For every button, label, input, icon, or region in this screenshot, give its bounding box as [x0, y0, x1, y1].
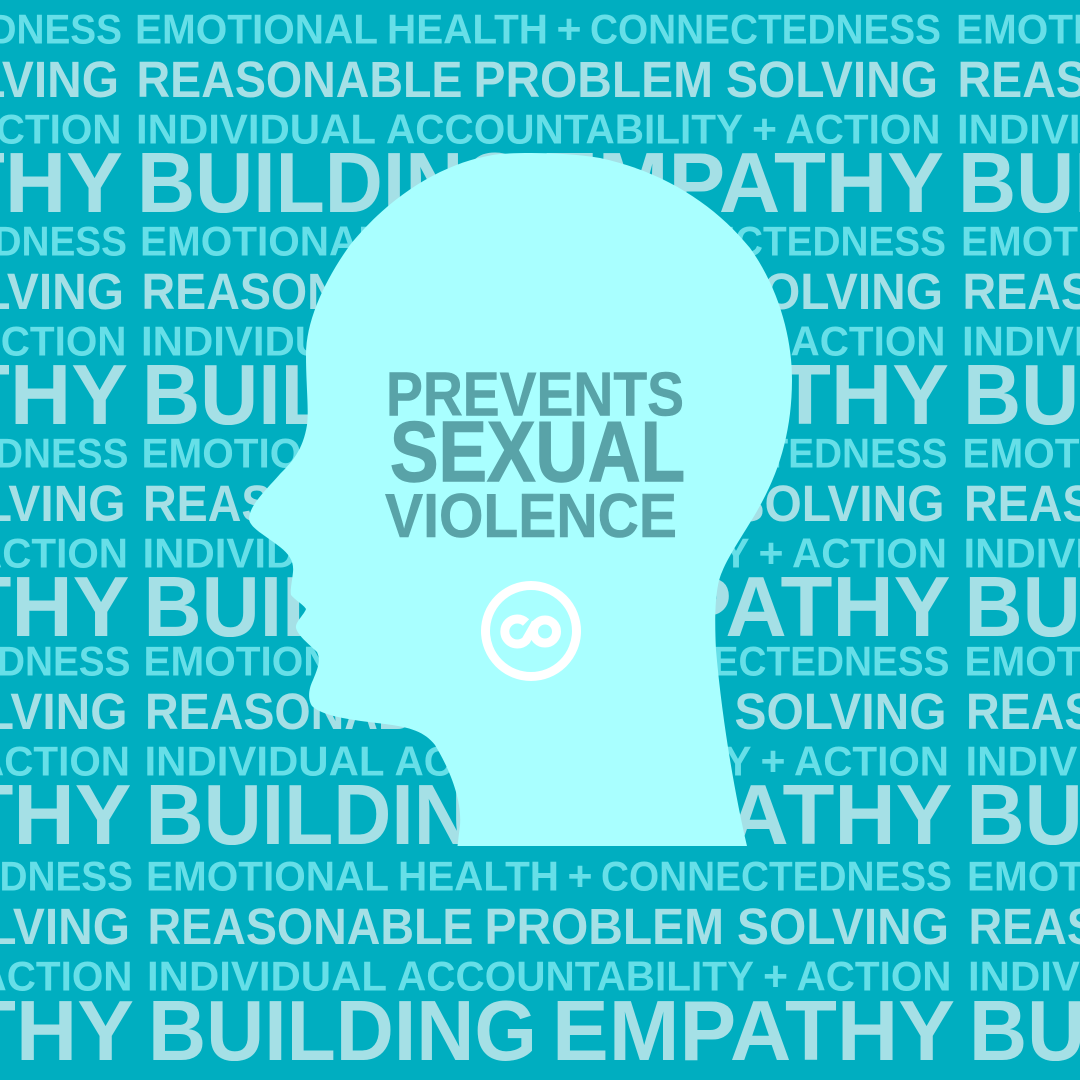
- row: reasonable problem solving: SOLVING: [731, 263, 943, 320]
- row: individual accountability: ACCOUNTABILITY: [391, 318, 748, 364]
- row: emotional health: EMOTIONAL: [146, 852, 389, 900]
- text pattern block 2: [0, 218, 1080, 443]
- row: reasonable problem solving: [0, 475, 1080, 532]
- row: reasonable problem solving: [0, 898, 1080, 955]
- row: individual accountability: [0, 318, 1080, 364]
- heading: prevents sexual violence: [385, 360, 685, 551]
- row: individual accountability: ACTION: [792, 530, 947, 576]
- row: emotional health: CONNECTEDNESS: [596, 430, 948, 476]
- row: individual accountability: [0, 530, 1080, 576]
- row: reasonable problem solving: PROBLEM: [480, 475, 720, 532]
- row: reasonable problem solving: PROBLEM: [478, 263, 718, 320]
- row: emotional health: HEALTH: [396, 638, 556, 684]
- row: emotional health: +: [562, 218, 586, 264]
- row: individual accountability: +: [760, 738, 786, 784]
- row: emotional health: [0, 218, 1080, 264]
- row: reasonable problem solving: REASONABLE: [142, 263, 468, 320]
- row: individual accountability: ACTION: [786, 106, 940, 152]
- row: emotional health: EMOTIONAL: [140, 218, 383, 264]
- row: emotional health: CONNECTEDNESS: [598, 638, 950, 684]
- row: emotional health: +: [568, 852, 592, 900]
- row: reasonable problem solving: PROBLEM: [484, 898, 724, 955]
- row: emotional health: CONNECTEDNESS: [595, 218, 946, 264]
- row: building empathy: BUILDING: [144, 560, 532, 655]
- row: building empathy: [0, 984, 1080, 1079]
- row: building empathy: [0, 348, 1080, 443]
- row: individual accountability: +: [757, 318, 782, 364]
- heading line: violence: VIOLENCE: [385, 482, 677, 551]
- row: individual accountability: ACCOUNTABILITY: [397, 952, 754, 1000]
- row: individual accountability: ACCOUNTABILITY: [394, 738, 752, 784]
- row: emotional health: [0, 6, 1080, 52]
- row: building empathy: [0, 136, 1080, 231]
- row: individual accountability: INDIVIDUAL: [142, 530, 382, 576]
- row: emotional health: [0, 638, 1080, 684]
- row: individual accountability: ACTION: [790, 318, 946, 364]
- row: individual accountability: INDIVIDUAL: [144, 738, 384, 784]
- row: individual accountability: ACTION: [796, 952, 952, 1000]
- row: reasonable problem solving: SOLVING: [726, 51, 938, 108]
- row: building empathy: EMPATHY: [552, 984, 955, 1079]
- row: building empathy: EMPATHY: [548, 560, 950, 655]
- heading line: sexual: SEXUAL: [390, 405, 685, 500]
- row: reasonable problem solving: REASONABLE: [143, 475, 469, 532]
- row: reasonable problem solving: SOLVING: [737, 898, 949, 955]
- row: individual accountability: INDIVIDUAL: [147, 952, 387, 1000]
- row: reasonable problem solving: REASONABLE: [148, 898, 474, 955]
- row: building empathy: BUILDING: [148, 984, 537, 1079]
- text pattern block 5: [0, 852, 1080, 1079]
- row: individual accountability: INDIVIDUAL: [136, 106, 376, 152]
- row: building empathy: EMPATHY: [550, 768, 952, 863]
- row: individual accountability: ACCOUNTABILITY: [386, 106, 743, 152]
- row: emotional health: HEALTH: [392, 218, 553, 264]
- row: reasonable problem solving: PROBLEM: [482, 683, 722, 740]
- row: emotional health: CONNECTEDNESS: [590, 6, 941, 52]
- row: individual accountability: ACTION: [794, 738, 949, 784]
- row: building empathy: [0, 560, 1080, 655]
- text pattern block 4: [0, 638, 1080, 863]
- row: individual accountability: [0, 952, 1080, 1000]
- row: emotional health: [0, 430, 1080, 476]
- head silhouette: [249, 153, 792, 846]
- row: reasonable problem solving: SOLVING: [732, 475, 944, 532]
- row: emotional health: EMOTIONAL: [142, 430, 384, 476]
- row: reasonable problem solving: REASONABLE: [136, 51, 462, 108]
- heading line: prevents: PREVENTS: [386, 360, 684, 430]
- row: individual accountability: INDIVIDUAL: [141, 318, 381, 364]
- row: individual accountability: +: [752, 106, 777, 152]
- row: reasonable problem solving: [0, 683, 1080, 740]
- row: building empathy: EMPATHY: [541, 136, 944, 231]
- row: emotional health: +: [556, 6, 582, 52]
- row: emotional health: +: [563, 430, 588, 476]
- row: emotional health: EMOTIONAL: [135, 6, 378, 52]
- text pattern block 3: [0, 430, 1080, 655]
- row: individual accountability: ACCOUNTABILITY: [392, 530, 750, 576]
- row: emotional health: HEALTH: [398, 852, 559, 900]
- row: building empathy: [0, 768, 1080, 863]
- row: emotional health: +: [565, 638, 590, 684]
- row: reasonable problem solving: PROBLEM: [474, 51, 713, 108]
- icon: infinity logo in circle: [486, 586, 576, 676]
- row: individual accountability: [0, 738, 1080, 784]
- row: reasonable problem solving: [0, 51, 1080, 108]
- text pattern block 1: [0, 6, 1080, 231]
- row: emotional health: HEALTH: [394, 430, 554, 476]
- row: reasonable problem solving: [0, 263, 1080, 320]
- row: reasonable problem solving: REASONABLE: [145, 683, 471, 740]
- row: individual accountability: +: [763, 952, 788, 1000]
- row: individual accountability: [0, 106, 1080, 152]
- row: building empathy: BUILDING: [146, 768, 534, 863]
- row: building empathy: BUILDING: [137, 136, 526, 231]
- row: emotional health: EMOTIONAL: [144, 638, 386, 684]
- row: individual accountability: +: [758, 530, 784, 576]
- row: emotional health: [0, 852, 1080, 900]
- row: emotional health: HEALTH: [387, 6, 548, 52]
- row: reasonable problem solving: SOLVING: [734, 683, 946, 740]
- row: emotional health: CONNECTEDNESS: [601, 852, 952, 900]
- row: building empathy: BUILDING: [142, 348, 531, 443]
- row: building empathy: EMPATHY: [546, 348, 949, 443]
